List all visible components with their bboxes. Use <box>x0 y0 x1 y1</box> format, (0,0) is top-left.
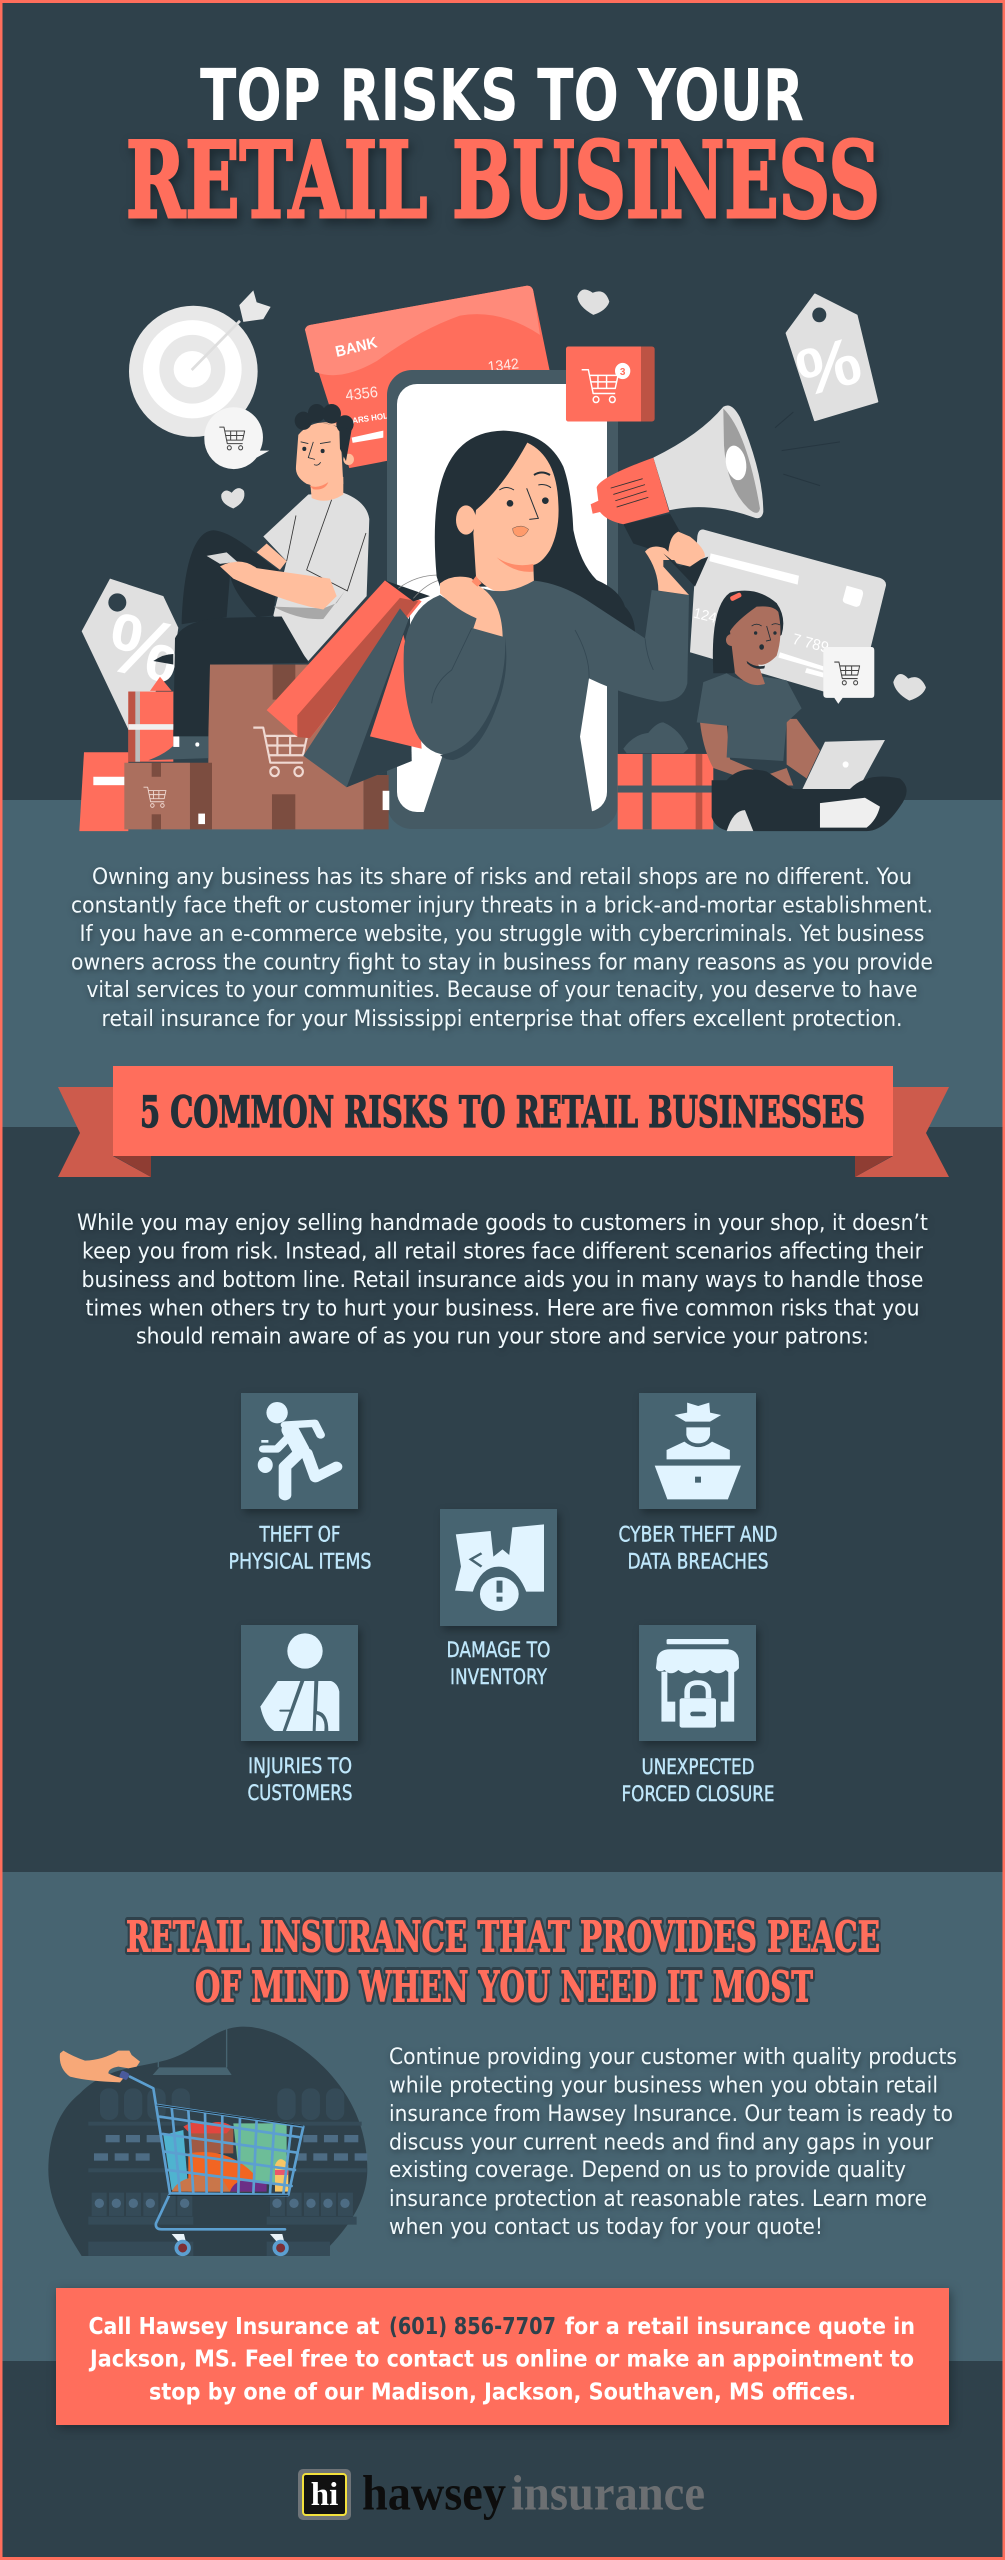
hand on shoulder <box>440 577 503 637</box>
hand <box>60 2051 140 2082</box>
section heading: peace of mind <box>126 1912 880 2012</box>
cart notification box: 3 <box>620 367 626 378</box>
square bubble with cart <box>823 647 874 704</box>
paragraph: retail insurance: when you contact us today for your quote! <box>389 2215 823 2240</box>
seated woman with laptop <box>697 591 907 831</box>
title <box>126 54 880 242</box>
speech bubble with cart <box>204 407 269 469</box>
paragraph: retail insurance: while protecting your business when you obtain retail <box>389 2074 938 2098</box>
intro paragraph <box>71 864 933 1032</box>
arms <box>700 722 793 786</box>
paragraph: retail insurance: existing coverage. Depend on us to provide quality <box>389 2158 906 2183</box>
sound lines <box>775 412 840 486</box>
call to action text: (601) 856-7707 <box>389 2314 556 2340</box>
intro paragraph: owners across the country fight to stay in business for many reasons as you provide <box>71 950 933 976</box>
intro paragraph: Owning any business has its share of risks and retail shops are no different. You <box>92 864 912 890</box>
credit card coral: 1342 <box>487 356 520 376</box>
risk: cyber theft and data breaches <box>618 1393 778 1574</box>
label: UNEXPECTED <box>642 1755 754 1780</box>
icon: running thief <box>241 1393 358 1509</box>
arms <box>257 544 287 570</box>
logo badge: hi <box>311 2477 338 2513</box>
long hair <box>435 431 635 633</box>
label <box>446 1638 550 1690</box>
ribbon banner <box>58 1066 949 1177</box>
intro paragraph: vital services to your communities. Because of your tenacity, you deserve to have <box>86 977 918 1003</box>
wheels <box>172 2234 287 2254</box>
gray credit card <box>690 529 886 694</box>
label: PHYSICAL ITEMS <box>228 1550 372 1574</box>
call to action text: Jackson, MS. Feel free to contact us online or make an appointment to <box>88 2346 914 2372</box>
back objects left <box>82 286 551 733</box>
left sleeve <box>404 595 505 755</box>
seated thigh <box>173 616 308 736</box>
ear <box>456 505 476 535</box>
megaphone <box>591 405 763 554</box>
logo wordmark: hawsey <box>362 2464 506 2520</box>
gray credit card: 124 <box>692 605 718 627</box>
cart notification box <box>566 346 655 422</box>
label <box>618 1523 778 1574</box>
label: DAMAGE TO <box>446 1638 550 1663</box>
call to action box <box>56 2288 949 2425</box>
raised leg <box>182 530 278 624</box>
face and neck <box>473 443 559 594</box>
label: DATA BREACHES <box>628 1550 768 1574</box>
risks intro paragraph: While you may enjoy selling handmade goods to customers in your shop, it doesn’t <box>77 1210 928 1236</box>
man <box>148 404 369 760</box>
coral shopping bag <box>79 752 128 831</box>
shelves <box>88 2088 367 2256</box>
call to action text: stop by one of our Madison, Jackson, Southaven, MS offices. <box>149 2380 856 2406</box>
icon: percent tag right: % <box>789 322 869 411</box>
icon: heart top <box>577 289 609 315</box>
paragraph: retail insurance: insurance protection at reasonable rates. Learn more <box>389 2187 927 2212</box>
label <box>228 1523 372 1574</box>
handheld phone <box>207 552 237 564</box>
paragraph: retail insurance: insurance from Hawsey Insurance. Our team is ready to <box>389 2102 953 2127</box>
icon: percent tag left: % <box>100 595 188 702</box>
shirt <box>263 493 369 661</box>
label <box>622 1755 774 1807</box>
shopping cart illustration <box>48 2027 367 2256</box>
shoe <box>148 736 208 760</box>
hero illustration <box>79 286 926 831</box>
intro paragraph: constantly face theft or customer injury threats in a brick-and-mortar establishment. <box>71 892 933 918</box>
icon: percent tag left <box>82 579 188 733</box>
woman with shopping bags <box>398 431 689 813</box>
icon: percent tag right <box>787 295 877 420</box>
bag handle arcs <box>398 575 440 598</box>
risks intro paragraph: business and bottom line. Retail insurance aids you in many ways to handle those <box>82 1267 924 1293</box>
icon: target with arrow <box>129 290 271 437</box>
laptop <box>802 740 885 791</box>
shirt <box>697 673 802 761</box>
coral shopping bag front <box>267 580 430 738</box>
store blob <box>48 2027 367 2256</box>
back objects right <box>577 289 926 701</box>
gray credit card: 7 789 <box>791 631 830 657</box>
call to action text <box>88 2314 915 2406</box>
second coral bag <box>370 635 422 749</box>
label: INJURIES TO <box>248 1754 352 1779</box>
coral grip <box>591 458 669 524</box>
risks intro paragraph: times when others try to hurt your business. Here are five common risks that you <box>86 1296 920 1322</box>
gift box right <box>618 722 713 829</box>
legs <box>712 769 907 831</box>
paragraph: retail insurance: discuss your current needs and find any gaps in your <box>389 2131 934 2156</box>
credit card coral <box>305 286 551 468</box>
phone <box>387 370 618 829</box>
paragraph: retail insurance: Continue providing your customer with quality products <box>389 2045 957 2070</box>
small cardboard box <box>124 763 212 829</box>
risk: theft of physical items <box>228 1393 372 1574</box>
label: THEFT OF <box>259 1523 340 1548</box>
horn <box>653 405 763 518</box>
hair <box>295 404 354 461</box>
icon: person with arm sling <box>241 1625 358 1741</box>
logo: hawsey insurance: insurance <box>511 2464 705 2520</box>
logo badge <box>298 2469 351 2520</box>
credit card coral: BANK <box>334 334 379 361</box>
label <box>248 1754 352 1806</box>
title line 1: TOP RISKS TO YOUR <box>200 54 804 137</box>
icon: damaged box with alert <box>440 1509 557 1626</box>
label: FORCED CLOSURE <box>622 1782 774 1807</box>
label: INVENTORY <box>450 1665 548 1690</box>
paragraph: retail insurance <box>389 2045 957 2240</box>
icon: hacker at laptop <box>639 1393 756 1509</box>
hair <box>713 591 783 673</box>
risks intro paragraph <box>77 1210 928 1350</box>
logo: hawsey insurance <box>298 2464 705 2520</box>
neck and face <box>310 477 343 501</box>
risk: damage to inventory <box>440 1509 557 1690</box>
label: CYBER THEFT AND <box>618 1523 778 1548</box>
sock <box>820 798 880 828</box>
groceries <box>163 2122 288 2192</box>
ceiling lamp <box>153 2028 232 2075</box>
label: CUSTOMERS <box>248 1781 352 1806</box>
ribbon tails <box>58 1087 151 1177</box>
intro paragraph: If you have an e-commerce website, you struggle with cybercriminals. Yet business <box>80 921 924 947</box>
icon: heart right <box>893 674 926 701</box>
ribbon band <box>113 1066 893 1156</box>
dark shopping bag <box>303 608 412 787</box>
call to action text: for a retail insurance quote in <box>565 2314 915 2340</box>
risk: injuries to customers <box>241 1625 358 1806</box>
risk: unexpected forced closure <box>622 1625 774 1807</box>
cart frame <box>130 2077 303 2229</box>
intro paragraph: retail insurance for your Mississippi enterprise that offers excellent protection. <box>102 1006 902 1032</box>
large cardboard box <box>208 665 389 829</box>
gift box <box>128 677 173 762</box>
icon: heart <box>221 488 244 508</box>
hand holding megaphone <box>645 532 708 595</box>
face <box>730 606 780 685</box>
sweater body <box>423 581 689 813</box>
risks intro paragraph: keep you from risk. Instead, all retail stores face different scenarios affecting their <box>82 1238 924 1264</box>
credit card coral: 4356 <box>345 384 379 405</box>
credit card coral: ARS HOLD <box>352 410 394 426</box>
call to action text: Call Hawsey Insurance at <box>88 2314 380 2340</box>
boxes, gifts and man <box>79 404 430 831</box>
risks intro paragraph: should remain aware of as you run your store and service your patrons: <box>136 1324 869 1350</box>
icon: locked storefront <box>639 1625 756 1741</box>
